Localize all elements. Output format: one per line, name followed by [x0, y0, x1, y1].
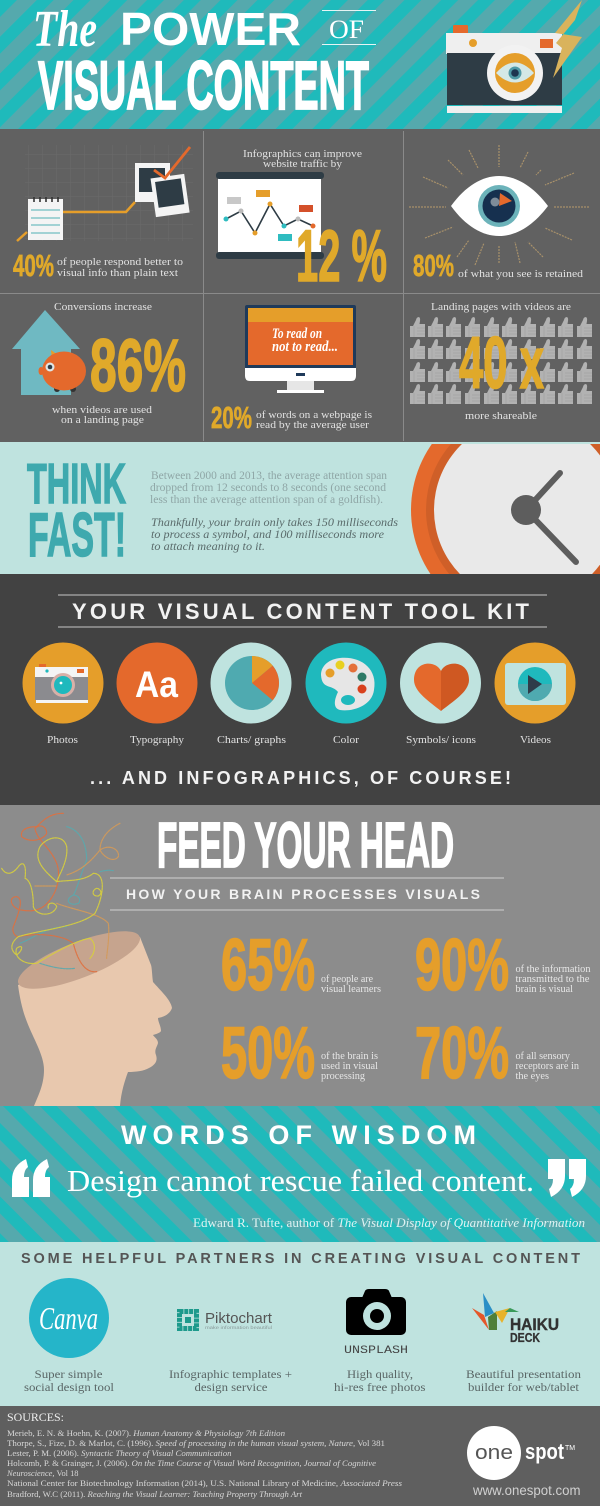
- stat: 90 percent: 90%: [415, 925, 509, 1006]
- text: source list: Merieb, E. N. & Hoehn, K. (2007). Human Anatomy & Physiology 7th Edition: [7, 1428, 285, 1438]
- logo: onespot: one: [475, 1442, 513, 1464]
- labels: tool kit: Charts/ graphs: [217, 734, 286, 746]
- stat: 86 percent: Conversions increase: [54, 302, 152, 313]
- logo: onespot: TM: [565, 1445, 575, 1452]
- stat: 40x: more shareable: [465, 411, 537, 422]
- stat: 50 percent: processing: [321, 1071, 365, 1082]
- heading: tool kit: YOUR VISUAL CONTENT TOOL KIT: [72, 599, 530, 624]
- labels: tool kit: Color: [333, 734, 359, 746]
- logo: haiku deck: HAIKU: [510, 1315, 559, 1334]
- panel: feed your head: [0, 805, 600, 1106]
- stat: 40 percent: visual info than plain text: [57, 268, 178, 279]
- stat: 86 percent: when videos are used: [52, 405, 153, 416]
- stat: 20 percent: of words on a webpage is: [256, 410, 372, 421]
- icon: eye with rays: [409, 145, 589, 265]
- attribution: Edward R. Tufte, author of The Visual Display of Quantitative Information: [193, 1215, 585, 1230]
- text: attention span: dropped from 12 seconds to 8 seconds (one second: [150, 482, 386, 494]
- text: source list: National Center for Biotechnology Information (2014), U.S. National Library of Medicine, Associated Press: [7, 1478, 403, 1488]
- logo: haiku deck: [472, 1293, 559, 1345]
- stat: 12 percent: 12 %: [296, 216, 387, 297]
- heading: sources: SOURCES:: [7, 1410, 64, 1424]
- logo: onespot: spot: [525, 1439, 565, 1464]
- descriptions: partners: Infographic templates +: [169, 1367, 292, 1381]
- stat: 86 percent: 86%: [90, 324, 186, 407]
- labels: tool kit: [47, 734, 551, 746]
- stat: 40x: Landing pages with videos are: [431, 302, 571, 313]
- stat: 40 percent: 40%: [13, 248, 54, 283]
- stat: 50 percent: of the brain is: [321, 1051, 378, 1062]
- descriptions: partners: Beautiful presentation: [466, 1367, 581, 1381]
- stat: 40 percent: of people respond better to: [57, 257, 183, 268]
- icon: closing quote: [548, 1159, 586, 1197]
- panel: sources: [0, 1406, 600, 1506]
- illustration: head profile: [12, 920, 172, 1106]
- stat: 65 percent: 65%: [221, 925, 315, 1006]
- stat: 90 percent: of the information: [516, 964, 590, 975]
- logo: unsplash: UNSPLASH: [344, 1345, 408, 1357]
- stat: 50 percent: 50%: [221, 1013, 315, 1094]
- stat: 70 percent: receptors are in: [516, 1061, 579, 1072]
- panel: words of wisdom: [0, 1106, 600, 1242]
- heading: think fast: [27, 452, 126, 570]
- illustration: dashed scribbles: [2, 813, 120, 972]
- icon: video: [494, 642, 576, 724]
- logo: haiku deck: DECK: [510, 1331, 540, 1345]
- chart: presentation board: [216, 172, 324, 259]
- stat: 65 percent: visual learners: [321, 984, 381, 995]
- stat: 12 percent: [216, 149, 387, 297]
- title: OF: OF: [329, 15, 364, 44]
- icon: color palette: [306, 642, 386, 724]
- logo: canva: Canva: [39, 1300, 98, 1336]
- title: The: The: [33, 1, 97, 58]
- panel: tool kit: [0, 574, 600, 805]
- text: brain speed: to process a symbol, and 100 milliseconds more: [151, 527, 385, 541]
- descriptions: partners: social design tool: [24, 1380, 115, 1394]
- heading: think fast: FAST!: [28, 501, 126, 570]
- logo: onespot: [467, 1426, 580, 1498]
- icon: desktop monitor: To read on: [272, 326, 322, 342]
- heading: partners: SOME HELPFUL PARTNERS IN CREATING VISUAL CONTENT: [21, 1251, 580, 1267]
- stat: 20 percent: read by the average user: [256, 420, 370, 431]
- title: POWER: POWER: [120, 3, 301, 55]
- descriptions: partners: [24, 1367, 581, 1394]
- stat: 50 percent: used in visual: [321, 1061, 378, 1072]
- text: source list: Thorpe, S., Fize, D. & Marlot, C. (1996). Speed of processing in the human visual system, Nature, Vol 381: [7, 1438, 385, 1448]
- icon: piggy bank: [38, 350, 86, 392]
- labels: tool kit: Symbols/ icons: [406, 734, 476, 746]
- stat: 80 percent: 80%: [413, 248, 454, 283]
- panel: think fast: [0, 442, 600, 574]
- stat: 40x: [410, 302, 592, 422]
- icon: notepad: [28, 197, 63, 240]
- icon: heart: [400, 642, 481, 724]
- panel: header banner: [0, 0, 600, 129]
- stat: 12 percent: Infographics can improve: [243, 149, 362, 160]
- stat: 12 percent: website traffic by: [263, 159, 343, 170]
- logo: onespot: www.onespot.com: [472, 1483, 580, 1498]
- stat: 20 percent: 20%: [211, 400, 252, 435]
- icon: polaroids and check mark: [135, 147, 190, 217]
- labels: tool kit: Photos: [47, 734, 78, 746]
- descriptions: partners: High quality,: [347, 1367, 413, 1381]
- stat: 65 percent: of people are: [321, 974, 374, 985]
- heading: and infographics: ... AND INFOGRAPHICS, OF COURSE!: [90, 768, 511, 788]
- stat: 90 percent: transmitted to the: [516, 974, 590, 985]
- panel: partners: [0, 1242, 600, 1406]
- icon: opening quote: [12, 1159, 50, 1197]
- logo: piktochart: make information beautiful: [205, 1325, 272, 1330]
- logo: unsplash: [344, 1289, 408, 1357]
- text: attention span: Between 2000 and 2013, the average attention span: [151, 470, 387, 482]
- icon: desktop monitor: [245, 305, 356, 393]
- icon: photos: [22, 642, 104, 724]
- text: attention span: [150, 470, 387, 506]
- icon: clock: [411, 444, 600, 574]
- text: source list: Neuroscience, Vol 18: [6, 1468, 78, 1478]
- text: source list: Lester, P. M. (2006). Syntactic Theory of Visual Communication: [7, 1448, 231, 1458]
- icon: typography: Aa: [135, 664, 178, 705]
- stat: 40 percent: [13, 145, 193, 283]
- descriptions: partners: hi-res free photos: [334, 1380, 426, 1394]
- quote text: Design cannot rescue failed content.: [67, 1163, 534, 1198]
- text: source list: Holcomb, P. & Grainger, J. (2006). On the Time Course of Visual Word Recognition, Journal of Cognitive: [7, 1458, 376, 1468]
- stat: 80 percent: [409, 145, 589, 283]
- stat: 20 percent: [211, 305, 372, 435]
- descriptions: partners: Super simple: [34, 1367, 102, 1381]
- stat: 86 percent: on a landing page: [61, 415, 144, 426]
- logo: piktochart: [180, 1310, 273, 1330]
- text: brain speed: Thankfully, your brain only takes 150 milliseconds: [151, 515, 398, 529]
- heading: words of wisdom: WORDS OF WISDOM: [121, 1120, 476, 1150]
- descriptions: partners: builder for web/tablet: [468, 1380, 580, 1394]
- stat: 90 percent: brain is visual: [516, 984, 573, 995]
- icon: house: [12, 310, 80, 395]
- icon grid: thumbs up: [410, 317, 592, 404]
- icon: pie chart: [210, 642, 292, 724]
- panel: statistics grid: [0, 129, 600, 443]
- icon: desktop monitor: not to read...: [272, 339, 338, 355]
- logo: canva: [29, 1278, 109, 1358]
- labels: tool kit: Videos: [520, 734, 551, 746]
- stat: 40x: 40 x: [459, 323, 544, 404]
- stat: 70 percent: 70%: [415, 1013, 509, 1094]
- text: source list: [6, 1428, 403, 1499]
- text: brain speed: to attach meaning to it.: [151, 539, 265, 553]
- logo: piktochart: Piktochart: [205, 1310, 273, 1327]
- stat: 86 percent: [12, 302, 186, 426]
- title: OF: [322, 10, 376, 44]
- labels: tool kit: Typography: [130, 734, 185, 746]
- stat: 80 percent: of what you see is retained: [458, 269, 584, 280]
- icon: typography: [116, 642, 198, 724]
- subheading: HOW YOUR BRAIN PROCESSES VISUALS: [126, 886, 480, 902]
- icon: camera with eye lens: [446, 0, 582, 113]
- text: source list: Bradford, W.C (2011). Reaching the Visual Learner: Teaching Property Through Art: [7, 1489, 303, 1499]
- stat: 70 percent: the eyes: [516, 1071, 549, 1082]
- text: brain speed: [151, 515, 398, 553]
- stat: 70 percent: of all sensory: [516, 1051, 570, 1062]
- heading: think fast: THINK: [27, 452, 126, 516]
- descriptions: partners: design service: [194, 1380, 268, 1394]
- text: attention span: less than the average attention span of a goldfish).: [150, 494, 383, 506]
